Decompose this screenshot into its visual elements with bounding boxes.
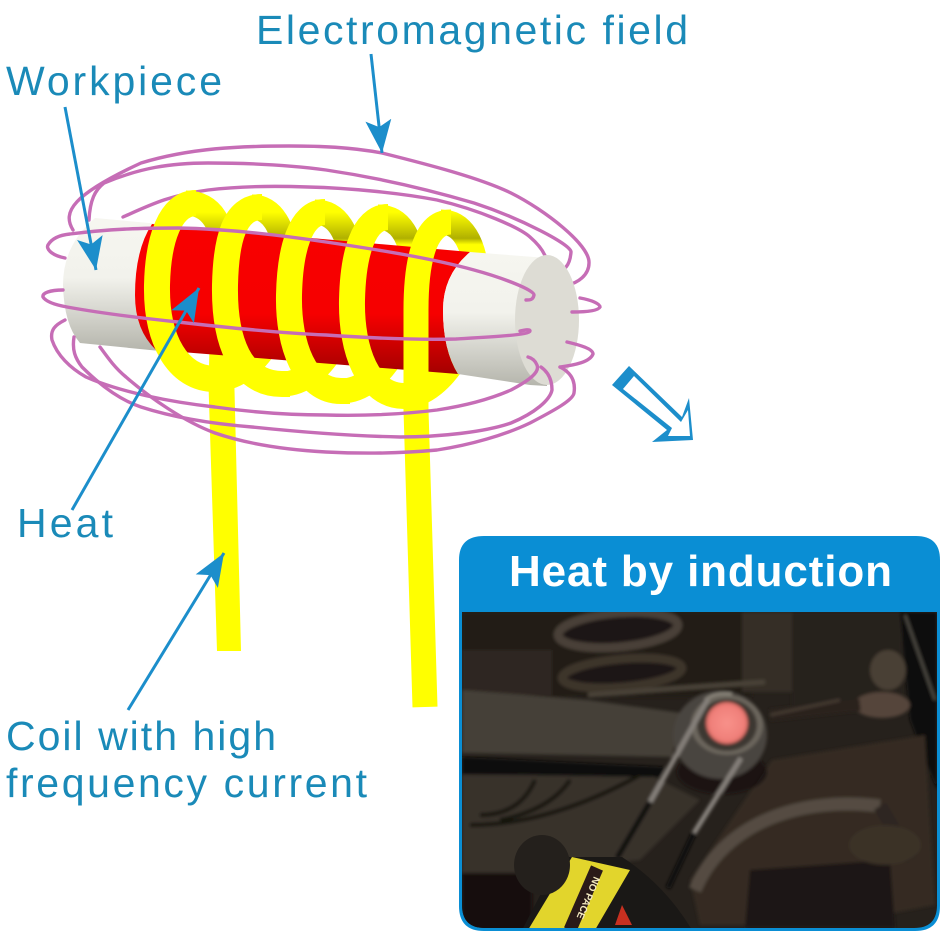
panel heading: Heat by induction — [509, 547, 892, 596]
label: coil with high frequency current: Coil with high — [6, 713, 276, 759]
panel background and header — [459, 536, 940, 931]
coil: left lead — [208, 370, 241, 651]
label: heat: Heat — [17, 500, 114, 546]
coil: front turns — [157, 203, 412, 396]
photo: induction heater on car bolt — [462, 608, 937, 933]
rear field loops — [69, 146, 589, 285]
front field loops — [43, 228, 600, 453]
coil: rear turns — [186, 203, 477, 396]
label: workpiece: Workpiece — [6, 58, 222, 104]
arrow: to electromagnetic field — [371, 54, 382, 153]
arrow: to heated zone — [72, 288, 199, 510]
arrow: outlined pointer toward photo — [612, 366, 693, 442]
induction coil and workpiece diagram — [43, 146, 600, 707]
coil: right lead with last turn — [416, 222, 451, 707]
label: coil with high frequency current: frequency current — [6, 760, 368, 806]
label: electromagnetic field: Electromagnetic field — [256, 7, 688, 53]
workpiece: end cap — [515, 255, 579, 385]
device: heater handle — [514, 835, 692, 930]
device label text: NO PACE — [574, 875, 601, 921]
arrow: to workpiece — [65, 107, 96, 270]
workpiece: left white section — [63, 218, 160, 351]
workpiece: right white section — [443, 252, 547, 386]
panel: heat by induction — [459, 536, 940, 933]
arrow: to coil lead — [128, 553, 224, 710]
workpiece: heated red section — [135, 224, 470, 374]
